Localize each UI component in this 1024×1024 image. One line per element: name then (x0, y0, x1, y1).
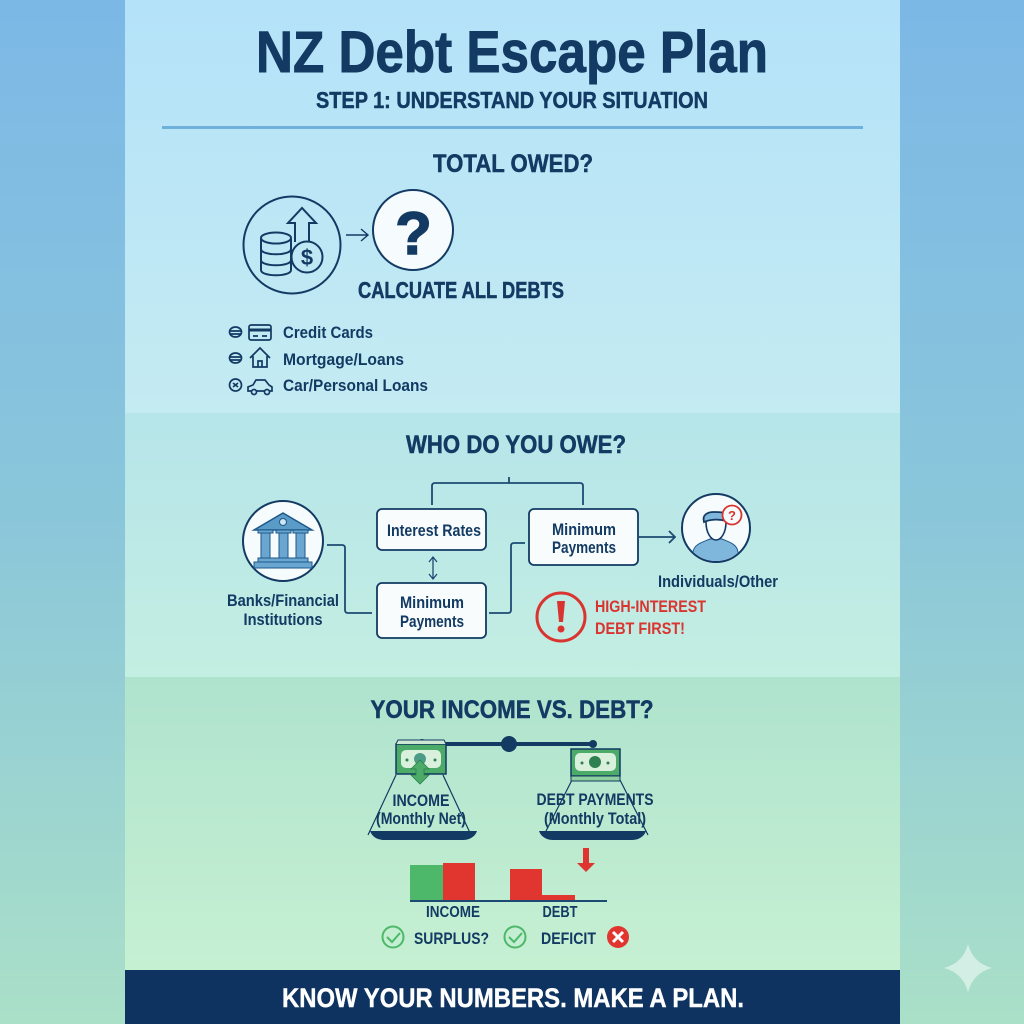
heading: total owed: TOTAL OWED? (433, 150, 593, 178)
scale label: income: INCOME (392, 791, 450, 810)
box: minimum payments right (529, 509, 638, 565)
panel: income vs debt (125, 677, 900, 970)
bar label: income: INCOME (426, 904, 480, 921)
scale label: debt payments (536, 790, 654, 828)
icon: bank (243, 501, 323, 581)
icon: debt banknote (571, 749, 620, 781)
icon: income banknote (396, 740, 446, 784)
scale label: debt payments: (Monthly Total) (544, 809, 646, 828)
balance scale (368, 736, 654, 840)
warning text: HIGH-INTEREST (595, 597, 707, 616)
arrow: down (577, 848, 595, 872)
bar chart (410, 863, 607, 921)
heading: who do you owe: WHO DO YOU OWE? (406, 431, 626, 459)
subtitle: STEP 1: UNDERSTAND YOUR SITUATION (316, 87, 708, 113)
warning text: DEBT FIRST! (595, 619, 685, 638)
panel: understand your situation header and total owed (125, 0, 900, 413)
box: interest rates: Interest Rates (387, 522, 481, 540)
title: NZ Debt Escape Plan (256, 20, 768, 85)
box: minimum payments left: Minimum (400, 594, 464, 612)
box: minimum payments left: Payments (400, 613, 464, 631)
arrow (346, 229, 368, 241)
footer banner (125, 970, 900, 1024)
heading: income vs debt: YOUR INCOME VS. DEBT? (370, 696, 654, 724)
box: minimum payments right: Minimum (552, 521, 616, 539)
status row (382, 926, 629, 948)
status row: SURPLUS? (414, 929, 489, 948)
label: banks: Banks/Financial (227, 591, 339, 610)
scale label: debt payments: DEBT PAYMENTS (536, 790, 654, 809)
scale label: income: (Monthly Net) (376, 809, 466, 828)
icon: question mark (373, 190, 453, 270)
debt list (230, 323, 428, 395)
box: minimum payments left (377, 583, 486, 638)
text: car loans: Car/Personal Loans (283, 376, 428, 395)
warning icon (537, 593, 585, 641)
panel: who do you owe (125, 413, 900, 677)
icon: person with question: ? (728, 508, 736, 523)
label: banks (227, 591, 339, 629)
status row: DEFICIT (541, 929, 597, 948)
scale label: income (376, 791, 466, 828)
icon: coins and arrow (244, 196, 340, 294)
icon: dollar sign: $ (301, 245, 313, 270)
label: banks: Institutions (244, 610, 322, 629)
icon: sparkle (944, 944, 992, 992)
footer banner: KNOW YOUR NUMBERS. MAKE A PLAN. (282, 983, 744, 1013)
box: minimum payments right: Payments (552, 539, 616, 557)
icon: person with question (682, 494, 750, 565)
label: individuals: Individuals/Other (658, 572, 778, 591)
icon: question mark: ? (395, 200, 432, 267)
label: calculate all debts: CALCUATE ALL DEBTS (358, 277, 564, 303)
connectors (327, 477, 675, 613)
box: interest rates (377, 509, 486, 550)
text: mortgage: Mortgage/Loans (283, 350, 404, 369)
text: credit cards: Credit Cards (283, 323, 373, 342)
bar label: debt: DEBT (542, 904, 578, 921)
warning text (595, 597, 707, 638)
